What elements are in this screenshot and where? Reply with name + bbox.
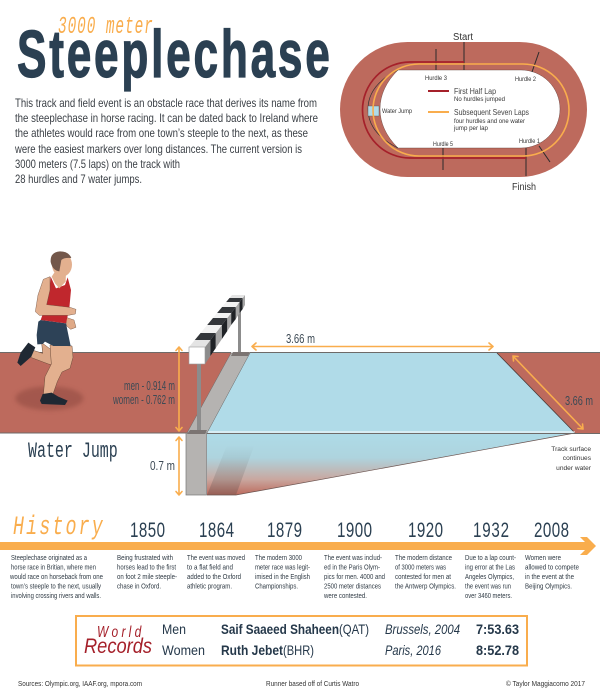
track labels: Hurdle 1 — [519, 138, 540, 145]
track legend: Subsequent Seven Laps — [454, 108, 529, 117]
panel border — [76, 616, 527, 666]
world records panel — [76, 616, 527, 666]
underwater shadow — [207, 438, 257, 495]
track surface note: Track surface — [551, 446, 591, 453]
water jump illustration — [0, 295, 600, 495]
subsequent seven laps route — [373, 64, 569, 156]
1850 note: horses lead to the first — [117, 562, 177, 572]
origin note: involving crossing rivers and walls. — [11, 591, 101, 600]
1850 note: on foot 2 mile steeple- — [117, 572, 177, 581]
women record — [162, 642, 519, 658]
runner — [15, 251, 83, 410]
track labels: Hurdle 5 — [433, 141, 453, 148]
intro paragraph: were the easiest markers over long distances. The current version is — [14, 142, 302, 156]
1879 note: Championships. — [255, 582, 298, 590]
back shoe — [17, 343, 35, 366]
beam top stripes — [189, 295, 245, 347]
1850 note: chase in Oxford. — [117, 582, 161, 590]
1920 note: contested for men at — [395, 572, 452, 581]
timeline years: 1932 — [473, 517, 509, 542]
title: Steeplechase: Steeplechase — [17, 18, 330, 92]
dimension labels: women - 0.762 m — [112, 392, 175, 407]
women record: 8:52.78 — [476, 642, 519, 658]
title: 3000 meter: 3000 meter — [58, 14, 153, 40]
2008 note — [525, 553, 579, 590]
beam side stripes — [205, 295, 245, 364]
runner shadow — [15, 386, 83, 410]
near arm — [35, 277, 76, 315]
intro paragraph: 28 hurdles and 7 water jumps. — [15, 172, 142, 186]
men record: Men — [162, 621, 186, 637]
track diagram — [340, 32, 587, 193]
track surface note — [551, 446, 592, 472]
dimension labels — [112, 331, 593, 473]
1879 note: imised in the English — [255, 572, 310, 581]
world records heading: Records — [84, 635, 152, 658]
men record: Saif Saaeed Shaheen — [221, 621, 339, 637]
2008 note: Beijing Olympics. — [525, 582, 572, 590]
track labels — [382, 32, 540, 193]
timeline years: 1920 — [408, 517, 443, 542]
hair — [51, 251, 71, 271]
intro paragraph: This track and field event is an obstacle race that derives its name from — [15, 96, 317, 110]
history section — [0, 512, 596, 600]
1932 note: Angeles Olympics, — [465, 572, 514, 581]
origin note: horse race in Britian, where men — [11, 562, 96, 572]
1864 note — [187, 553, 245, 590]
1864 note: athletic program. — [187, 582, 232, 590]
1900 note: pics for men. 4000 and — [324, 572, 385, 581]
women record: Ruth Jebet — [221, 642, 283, 658]
track legend: jump per lap — [453, 125, 488, 132]
track surface right — [497, 353, 600, 433]
barrier front — [186, 433, 206, 495]
far arm — [66, 317, 76, 329]
hurdle and start/finish lines — [436, 42, 550, 176]
track labels: Hurdle 2 — [515, 76, 536, 83]
front post base — [187, 430, 207, 434]
2008 note: Women were — [525, 553, 561, 562]
1879 note: The modern 3000 — [255, 553, 302, 562]
footer credits: Runner based off of Curtis Watro — [266, 681, 359, 688]
1900 note: ed in the Paris Olym- — [324, 562, 380, 572]
2008 note: in the event at the — [525, 572, 574, 581]
singlet — [41, 277, 71, 323]
1932 note: ing error at the Las — [465, 562, 515, 572]
world records heading — [84, 622, 152, 658]
history heading: History — [13, 512, 104, 542]
1932 note — [465, 553, 516, 600]
1864 note: added to the Oxford — [187, 572, 241, 581]
dimension labels: 0.7 m — [150, 458, 175, 473]
1864 note: The event was moved — [187, 553, 245, 562]
intro paragraph — [14, 96, 318, 186]
dimension labels: men - 0.914 m — [124, 378, 175, 393]
track surface left — [0, 353, 231, 433]
footer credits: © Taylor Maggiacomo 2017 — [506, 680, 585, 688]
men record — [162, 621, 519, 637]
intro paragraph: 3000 meters (7.5 laps) on the track with — [15, 157, 180, 171]
infield — [380, 70, 560, 148]
track legend: No hurdles jumped — [454, 96, 505, 103]
1900 note: 2500 meter distances — [324, 582, 381, 590]
dimension arrows — [176, 343, 583, 495]
intro paragraph: the athletes would race from one town’s steeple to the next, as these — [15, 126, 308, 140]
1920 note: the Antwerp Olympics. — [395, 582, 456, 590]
1850 note — [117, 553, 177, 590]
neck and shoulder — [52, 272, 66, 288]
2008 note: allowed to compete — [525, 562, 579, 572]
back post base — [231, 352, 250, 356]
men record: Brussels, 2004 — [385, 621, 460, 637]
dimension labels: 3.66 m — [286, 331, 315, 346]
track legend: First Half Lap — [454, 87, 496, 96]
front shoe — [40, 393, 68, 405]
1920 note: The modern distance — [395, 553, 452, 562]
1920 note — [395, 553, 456, 590]
track legend: four hurdles and one water — [454, 118, 526, 125]
track surface note: continues — [563, 455, 592, 462]
1900 note — [323, 553, 385, 600]
1932 note: Due to a lap count- — [465, 553, 516, 562]
front hurdle post — [197, 362, 201, 431]
water jump heading: Water Jump — [28, 438, 118, 464]
men record: (QAT) — [339, 621, 369, 637]
1900 note: The event was includ- — [324, 553, 382, 562]
intro paragraph: the steeplechase in horse racing. It can be dated back to Ireland where — [15, 111, 318, 125]
timeline years: 2008 — [534, 517, 569, 542]
women record: Paris, 2016 — [385, 642, 441, 658]
footer credits: Sources: Olympic.org, IAAF.org, mpora.com — [18, 681, 142, 688]
timeline years: 1900 — [337, 517, 372, 542]
world records heading: World — [97, 622, 142, 640]
timeline years — [130, 517, 569, 542]
1920 note: of 3000 meters was — [395, 562, 446, 572]
water surface — [207, 353, 575, 433]
shorts — [37, 320, 71, 346]
first half lap route — [363, 62, 526, 158]
1932 note: over 3460 meters. — [465, 591, 512, 600]
track labels: Start — [453, 32, 473, 43]
water jump pit — [368, 106, 379, 116]
origin note: Steeplechase originated as a — [11, 553, 88, 562]
timeline years: 1879 — [267, 517, 302, 542]
men record: 7:53.63 — [476, 621, 519, 637]
track labels: Hurdle 3 — [425, 75, 447, 82]
head — [52, 253, 72, 277]
1932 note: the event was run — [465, 582, 511, 590]
1879 note — [255, 553, 310, 590]
edge lines — [0, 352, 600, 434]
water edge highlight — [207, 431, 575, 433]
timeline years: 1850 — [130, 517, 165, 542]
track labels: Finish — [512, 182, 536, 193]
track legend — [428, 87, 529, 132]
water jump arc — [368, 70, 398, 148]
footer credits — [18, 680, 585, 688]
back hurdle post — [238, 303, 241, 352]
barrier top — [187, 353, 250, 433]
1864 note: to a flat field and — [187, 562, 233, 572]
1900 note: were contested. — [323, 591, 367, 600]
track labels: Water Jump — [382, 108, 412, 115]
back leg — [30, 343, 57, 366]
timeline arrow — [0, 537, 596, 555]
women record: Women — [162, 642, 205, 658]
timeline years: 1864 — [199, 517, 234, 542]
1879 note: meter race was legit- — [255, 562, 310, 572]
underwater slope — [207, 433, 575, 495]
hurdle beam — [189, 295, 245, 364]
origin note — [9, 553, 103, 600]
track surface note: under water — [556, 465, 592, 472]
track surface — [340, 42, 587, 177]
origin note: would race on horseback from one — [9, 572, 103, 581]
origin note: town’s steeple to the next, usually — [11, 582, 101, 590]
beam front face — [189, 347, 205, 364]
front leg — [43, 345, 73, 395]
1850 note: Being frustrated with — [117, 553, 173, 562]
women record: (BHR) — [283, 642, 314, 658]
